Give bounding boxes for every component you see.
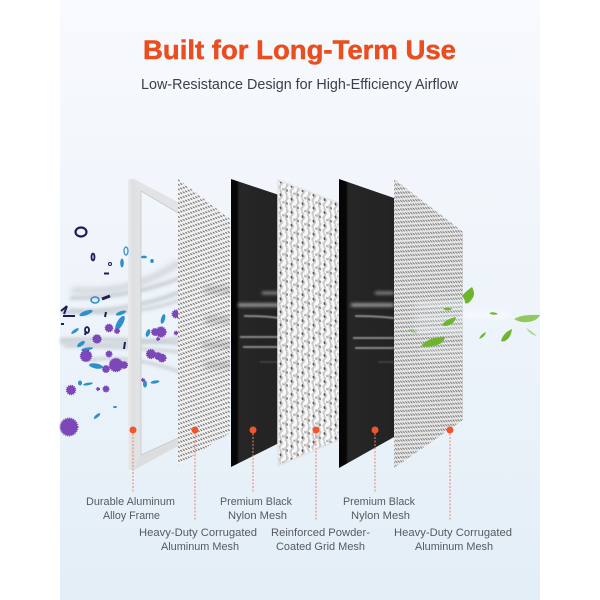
label: premium black nylon mesh 2: Premium Black xyxy=(343,496,415,508)
label: durable aluminum alloy frame: Alloy Frame xyxy=(103,510,160,522)
title: Built for Long-Term Use xyxy=(143,35,456,65)
label: durable aluminum alloy frame: Durable Aluminum xyxy=(86,496,175,508)
label: premium black nylon mesh 1: Premium Black xyxy=(220,496,292,508)
callout lines and dots xyxy=(130,426,454,521)
pollutant particles xyxy=(60,228,180,436)
subtitle: Low-Resistance Design for High-Efficiency Airflow xyxy=(141,77,459,93)
label: premium black nylon mesh 2: Nylon Mesh xyxy=(351,510,410,522)
green leaves xyxy=(408,287,540,347)
panel: corrugated aluminum mesh 2 xyxy=(394,179,470,468)
label: heavy-duty corrugated aluminum mesh 1 xyxy=(139,527,257,553)
frame: durable aluminum alloy frame xyxy=(128,179,178,471)
label: reinforced powder-coated grid mesh xyxy=(271,527,370,553)
icon: dark rings and specks xyxy=(61,228,125,350)
background panel xyxy=(60,0,540,600)
label: premium black nylon mesh 1 xyxy=(220,496,292,522)
label: heavy-duty corrugated aluminum mesh 1: Heavy-Duty Corrugated xyxy=(139,527,257,539)
icon: blue bacteria xyxy=(70,247,166,420)
label: heavy-duty corrugated aluminum mesh 2: Heavy-Duty Corrugated xyxy=(394,527,512,539)
icon: purple viruses xyxy=(60,310,180,436)
label: premium black nylon mesh 1: Nylon Mesh xyxy=(228,510,287,522)
label: reinforced powder-coated grid mesh: Coated Grid Mesh xyxy=(276,541,365,553)
label: reinforced powder-coated grid mesh: Reinforced Powder- xyxy=(271,527,370,539)
label: heavy-duty corrugated aluminum mesh 2 xyxy=(394,527,512,553)
label: durable aluminum alloy frame xyxy=(86,496,175,522)
panel: black nylon mesh 1 xyxy=(231,179,279,467)
airflow streams: incoming xyxy=(60,262,180,372)
label: heavy-duty corrugated aluminum mesh 2: Aluminum Mesh xyxy=(415,541,493,553)
panel: corrugated aluminum mesh 1 xyxy=(178,179,232,465)
outgoing airflow xyxy=(463,312,510,318)
panel: black nylon mesh 2 xyxy=(339,179,394,468)
label: premium black nylon mesh 2 xyxy=(343,496,415,522)
panel: reinforced powder-coated grid mesh xyxy=(278,180,339,466)
label: heavy-duty corrugated aluminum mesh 1: Aluminum Mesh xyxy=(161,541,239,553)
